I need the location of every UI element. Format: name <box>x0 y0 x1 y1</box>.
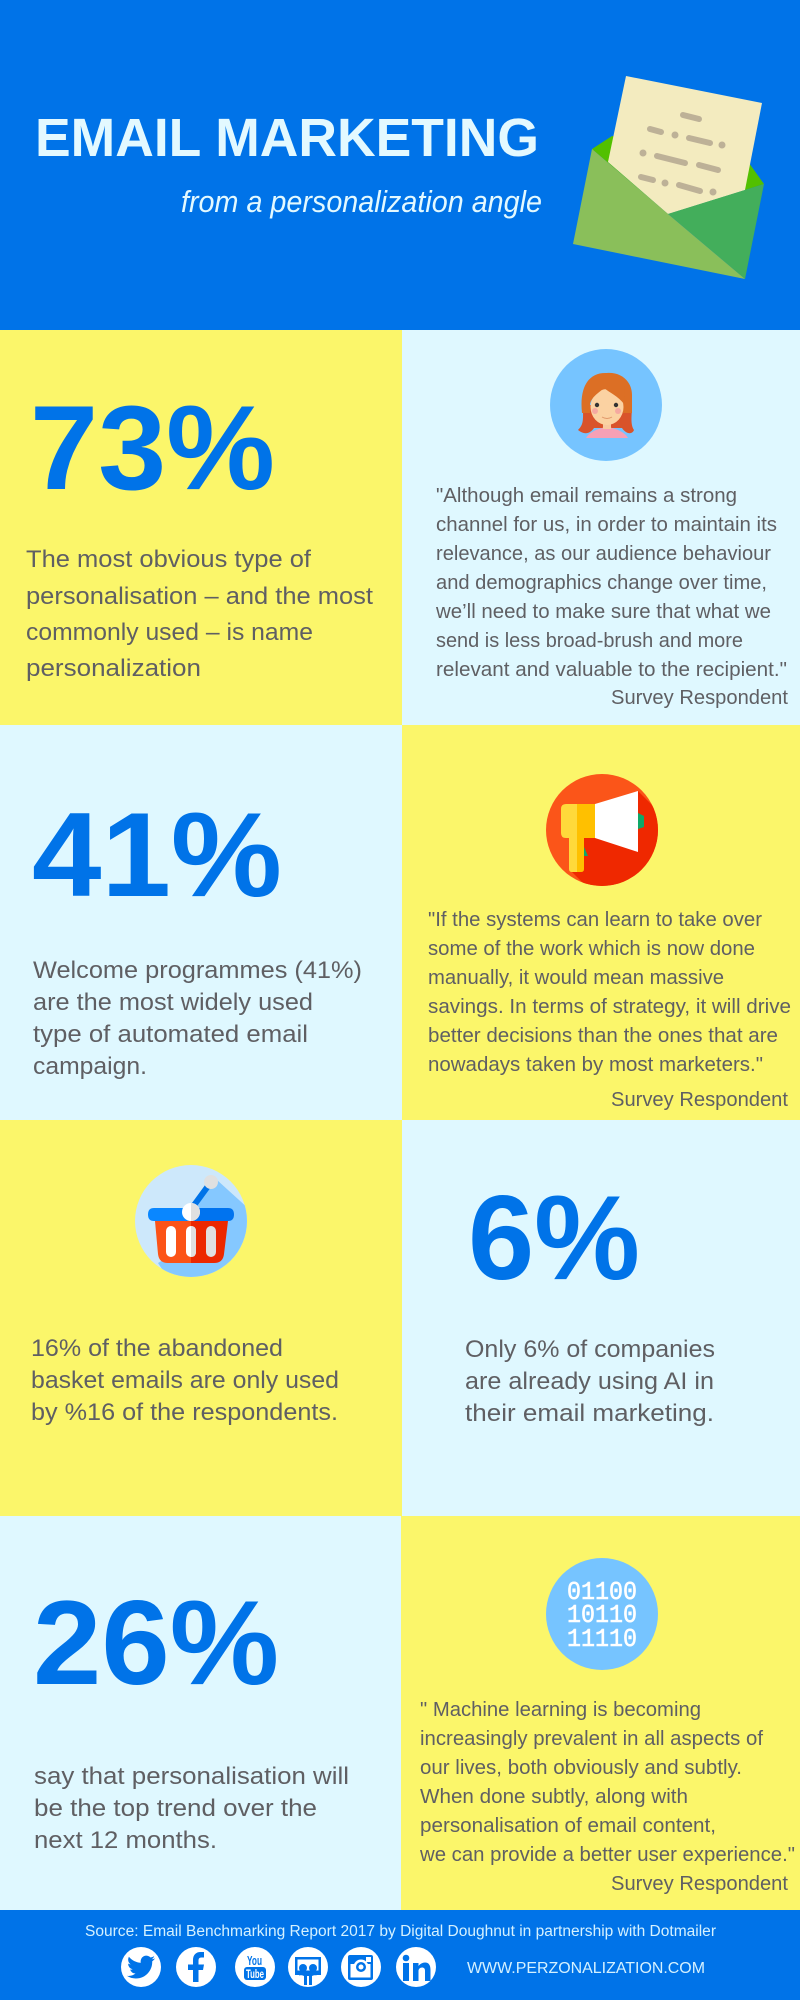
stat description <box>465 1336 715 1427</box>
subtitle: from a personalization angle <box>181 184 542 219</box>
quote text: relevance, as our audience behaviour <box>436 542 771 565</box>
quote text: manually, it would mean massive <box>428 966 724 989</box>
quote text: "If the systems can learn to take over <box>428 908 762 931</box>
panel: 26% stat <box>0 1516 401 1910</box>
stat description: campaign. <box>33 1053 147 1080</box>
quote text: we’ll need to make sure that what we <box>435 600 771 623</box>
quote text: personalisation of email content, <box>420 1814 716 1837</box>
quote text: and demographics change over time, <box>436 571 767 594</box>
stat description: their email marketing. <box>465 1400 714 1427</box>
stat description <box>33 957 362 1080</box>
stat description <box>31 1335 339 1426</box>
icon: youtube: You <box>247 1953 262 1968</box>
source line: Source: Email Benchmarking Report 2017 by Digital Doughnut in partnership with Dotmailer <box>85 1923 716 1940</box>
icon: facebook <box>176 1947 216 1987</box>
quote text <box>419 1698 795 1866</box>
stat description: basket emails are only used <box>31 1367 339 1394</box>
icon: shopping basket <box>135 1165 247 1277</box>
panel: 6% stat <box>402 1120 800 1516</box>
stat description: Only 6% of companies <box>465 1336 715 1363</box>
icon: woman avatar <box>550 349 662 461</box>
stat description: 16% of the abandoned <box>31 1335 283 1362</box>
panel: footer <box>0 1910 800 2000</box>
panel: 41% stat <box>0 725 402 1120</box>
icon: instagram <box>341 1947 381 1987</box>
quote text: better decisions than the ones that are <box>428 1024 778 1047</box>
stat description: are already using AI in <box>465 1368 714 1395</box>
panel: quote about automation <box>402 725 800 1120</box>
stat description: Welcome programmes (41%) <box>33 957 362 984</box>
quote text: "Although email remains a strong <box>436 484 737 507</box>
quote attribution: Survey Respondent <box>611 1872 788 1895</box>
quote text: channel for us, in order to maintain its <box>436 513 777 536</box>
title: EMAIL MARKETING <box>35 108 539 168</box>
big number 6%: 6% <box>468 1171 640 1305</box>
quote text: send is less broad-brush and more <box>436 629 743 652</box>
big number 41%: 41% <box>32 788 282 922</box>
quote text: savings. In terms of strategy, it will drive <box>428 995 791 1018</box>
quote text: relevant and valuable to the recipient." <box>436 658 787 681</box>
panel: quote about machine learning <box>401 1516 800 1910</box>
quote text: our lives, both obviously and subtly. <box>420 1756 742 1779</box>
quote text: When done subtly, along with <box>420 1785 688 1808</box>
icon: binary code: 01100 <box>567 1577 637 1607</box>
website address: WWW.PERZONALIZATION.COM <box>467 1960 705 1977</box>
quote text: some of the work which is now done <box>428 937 755 960</box>
quote text: nowadays taken by most marketers." <box>428 1053 763 1076</box>
icon: envelope with letter <box>573 76 764 279</box>
quote text <box>428 908 791 1076</box>
icon: youtube <box>235 1947 275 1987</box>
quote text: we can provide a better user experience." <box>419 1843 795 1866</box>
quote text <box>435 484 787 681</box>
icon: slideshare <box>288 1947 328 1987</box>
stat description: The most obvious type of <box>26 546 311 573</box>
stat description: commonly used – is name <box>26 619 313 646</box>
icon: binary code: 11110 <box>567 1624 637 1654</box>
stat description: say that personalisation will <box>34 1763 349 1790</box>
icon: youtube: Tube <box>246 1967 264 1981</box>
icon: binary code: 10110 <box>567 1600 637 1630</box>
stat description: personalisation – and the most <box>26 583 373 610</box>
stat description: personalization <box>26 655 201 682</box>
stat description <box>34 1763 349 1854</box>
quote attribution: Survey Respondent <box>611 686 788 709</box>
quote text: increasingly prevalent in all aspects of <box>420 1727 763 1750</box>
panel: quote about relevance <box>402 330 800 725</box>
stat description: next 12 months. <box>34 1827 217 1854</box>
stat description <box>26 546 373 682</box>
stat description: by %16 of the respondents. <box>31 1399 338 1426</box>
quote text: " Machine learning is becoming <box>420 1698 701 1721</box>
icon: twitter <box>121 1947 161 1987</box>
quote attribution: Survey Respondent <box>611 1088 788 1111</box>
big number 73%: 73% <box>30 381 275 515</box>
panel: header <box>0 0 800 330</box>
stat description: be the top trend over the <box>34 1795 317 1822</box>
stat description: type of automated email <box>33 1021 308 1048</box>
icon: megaphone <box>546 774 658 886</box>
panel: 73% stat <box>0 330 402 725</box>
panel: abandoned basket stat <box>0 1120 402 1516</box>
stat description: are the most widely used <box>33 989 313 1016</box>
icon: binary code <box>546 1558 658 1670</box>
big number 26%: 26% <box>33 1576 279 1710</box>
icon: linkedin <box>396 1947 436 1987</box>
